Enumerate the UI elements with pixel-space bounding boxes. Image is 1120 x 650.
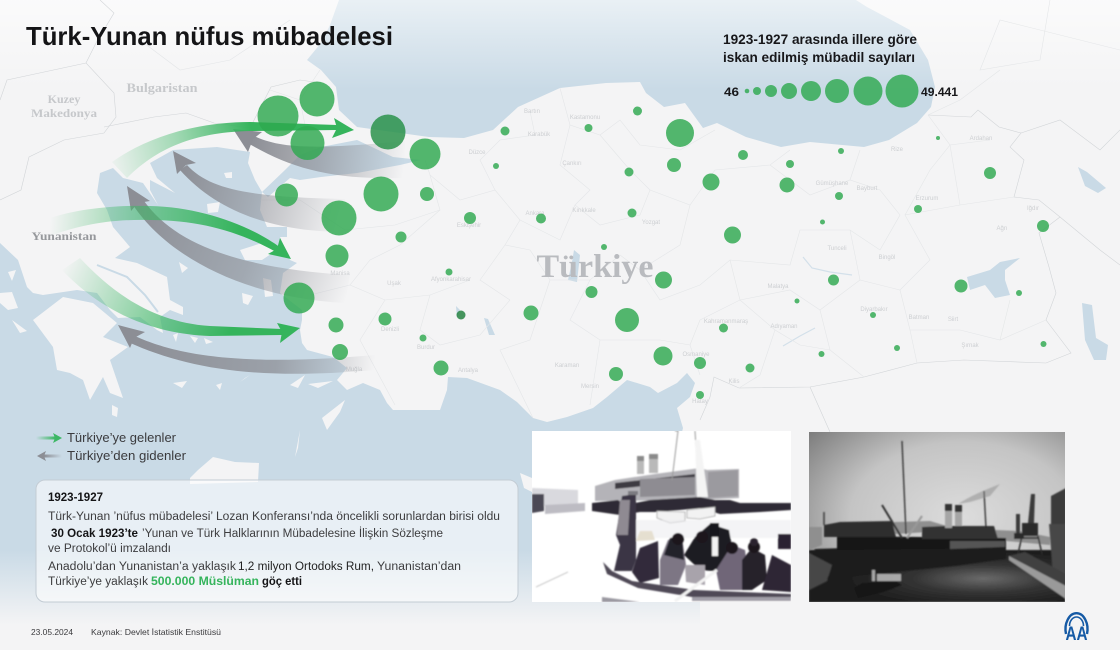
icon: AA logo	[1066, 613, 1088, 645]
hills	[809, 521, 1050, 550]
city labels: Uşak	[387, 281, 402, 287]
city labels: Manisa	[330, 271, 350, 277]
icon: AA logo: AA	[1066, 624, 1088, 645]
city labels: Siirt	[948, 317, 958, 323]
legend: departing label: Türkiye’den gidenler	[67, 449, 186, 463]
city labels: Ağrı	[996, 226, 1008, 232]
footer source: Kaynak: Devlet İstatistik Enstitüsü	[91, 627, 221, 637]
city labels: Kahramanmaraş	[704, 319, 748, 325]
panel text: agreement	[48, 527, 443, 555]
city labels: Kastamonu	[570, 115, 600, 121]
city labels: Osmaniye	[682, 352, 710, 358]
panel text: line 1: Türk-Yunan ’nüfus mübadelesi’ Lozan Konferansı’nda öncelikli sorunlardan birisi oldu	[48, 511, 500, 523]
city labels: Ankara	[525, 211, 545, 217]
city labels: Antalya	[458, 368, 479, 374]
city labels: Düzce	[468, 150, 486, 156]
gradient: top fade	[0, 0, 1120, 90]
arrow: green to Turkey 2	[50, 206, 291, 259]
panel text: migration figures: Yunanistan’dan	[377, 561, 461, 573]
country labels: Kuzey	[48, 92, 80, 106]
country labels	[31, 80, 654, 285]
sea: Black Sea	[307, 0, 935, 147]
cranes and quay	[1016, 494, 1035, 533]
city labels: Çankırı	[562, 161, 582, 167]
legend max value: 49.441	[921, 85, 958, 99]
title: Türk-Yunan nüfus mübadelesi	[26, 21, 393, 51]
city labels: Ardahan	[970, 136, 992, 142]
arrow: gray from Turkey 1	[233, 129, 405, 178]
sea: Aegean and Mediterranean	[0, 147, 700, 650]
city labels: Karaman	[555, 363, 579, 369]
panel text: migration figures: 1,2 milyon Ortodoks Rum,	[238, 561, 374, 573]
country labels: Bulgaristan	[126, 80, 198, 95]
city labels: Kilis	[728, 379, 740, 385]
boat people	[614, 494, 636, 571]
info panel	[36, 480, 518, 602]
city labels: Karabük	[528, 132, 551, 138]
water	[809, 550, 1065, 602]
legend circles	[745, 74, 918, 108]
city labels: Tunceli	[827, 246, 847, 252]
legend heading	[723, 32, 917, 65]
city labels: Malatya	[767, 284, 789, 290]
panel text: migration figures: Anadolu’dan Yunanistan’a yaklaşık	[48, 561, 236, 573]
city labels: Hatay	[692, 399, 708, 405]
city labels: Bartın	[524, 109, 540, 115]
land: islands	[0, 164, 532, 492]
panel text: agreement: 30 Ocak 1923’te	[51, 528, 138, 540]
legend heading: 1923-1927 arasında illere göre	[723, 32, 917, 47]
crowd band	[592, 497, 791, 515]
country labels: Yunanistan	[32, 229, 97, 243]
city labels: Afyonkarahisar	[431, 277, 471, 283]
sea: Marmara	[262, 140, 421, 197]
city labels: Bayburt	[857, 186, 878, 192]
hull	[814, 547, 1007, 572]
arrow legend	[36, 431, 186, 463]
city labels: Yozgat	[642, 220, 660, 226]
city labels: Batman	[909, 315, 929, 321]
city labels: Bingöl	[879, 255, 895, 261]
city labels: Eskişehir	[457, 223, 481, 229]
city labels: Adıyaman	[770, 324, 798, 330]
rivers and dams	[783, 257, 852, 346]
city labels: Diyarbakır	[860, 307, 888, 313]
photo: boat with emigrants	[532, 431, 791, 602]
footer date: 23.05.2024	[31, 627, 73, 637]
land: Peloponnese	[33, 297, 128, 400]
small boat	[858, 582, 901, 594]
panel text: migration figures: Türkiye’ye yaklaşık	[48, 576, 148, 588]
gradient: bottom fade	[0, 550, 1120, 625]
country labels: Türkiye	[536, 249, 654, 285]
bubble legend	[723, 32, 958, 108]
city labels: Burdur	[417, 345, 435, 351]
boat hull and oar	[603, 562, 791, 597]
city labels: Muğla	[346, 367, 363, 373]
city labels: Denizli	[381, 327, 399, 333]
arrow: green to Turkey 3	[62, 258, 300, 343]
bubbles: resettled exchangees by province	[258, 82, 1049, 399]
panel text: agreement: ’Yunan ve Türk Halklarının Mübadelesine İlişkin Sözleşme	[142, 527, 443, 540]
arrow: green to Turkey 1	[112, 118, 354, 178]
panel text: migration figures: göç etti	[262, 576, 302, 588]
legend: departing arrow	[37, 451, 62, 461]
arrow: gray from Turkey 4	[118, 325, 375, 374]
strait of Euboea	[97, 265, 158, 312]
photo: steamship in harbour	[809, 432, 1066, 602]
legend min value: 46	[724, 85, 739, 99]
legend: arriving label: Türkiye’ye gelenler	[67, 431, 176, 445]
legend: arriving arrow	[36, 433, 62, 443]
city labels: Erzurum	[916, 196, 938, 202]
arrow: gray from Turkey 2	[173, 151, 345, 232]
city labels: Kırıkkale	[572, 208, 596, 214]
legend heading: iskan edilmiş mübadil sayıları	[723, 50, 915, 65]
panel text: migration figures	[48, 561, 461, 588]
panel text: migration figures: 500.000 Müslüman	[151, 576, 259, 588]
city labels: Iğdır	[1027, 206, 1039, 212]
panel heading: 1923-1927	[48, 492, 103, 504]
city labels: Gümüşhane	[816, 181, 849, 187]
country labels: Makedonya	[31, 106, 97, 120]
city labels	[330, 109, 1039, 405]
city labels: Şırnak	[961, 343, 980, 349]
arrows: migration flows	[50, 118, 405, 374]
ship and harbour background	[595, 468, 739, 501]
city labels: Rize	[891, 147, 904, 153]
panel text: agreement: ve Protokol’ü imzalandı	[48, 543, 171, 555]
lakes	[456, 167, 1108, 360]
city labels: Mersin	[581, 384, 599, 390]
arrow: gray from Turkey 3	[127, 186, 350, 303]
